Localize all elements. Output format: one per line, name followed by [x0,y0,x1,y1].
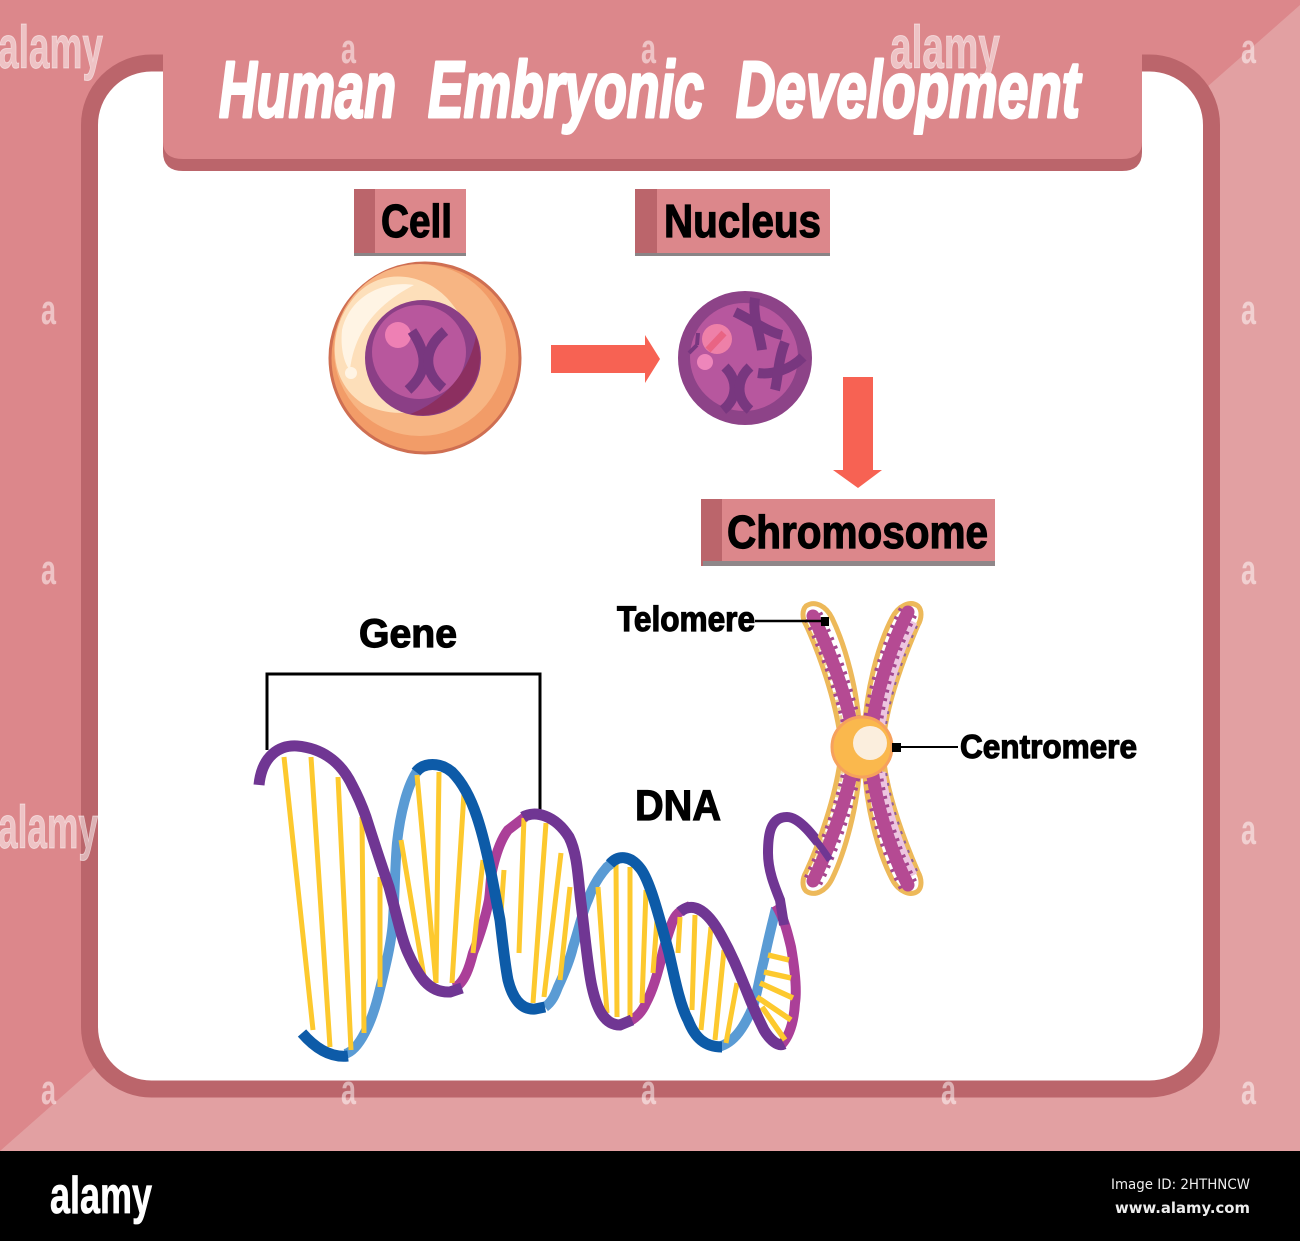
watermarks: a [1241,806,1256,853]
label: Centromere with leader: Centromere [960,728,1137,765]
back strand segments [345,770,796,1054]
watermarks: alamy [0,14,103,81]
label: Nucleus [635,189,830,256]
title: Development [736,45,1082,134]
watermarks: a [641,25,656,72]
panel: white rounded frame [90,63,1212,1089]
watermarks: a [41,546,56,593]
footer: image id: Image ID: 2HTHNCW [1111,1177,1250,1193]
watermarks: a [941,1066,956,1113]
DNA end over chromosome [787,817,830,860]
label: Cell: Cell [381,195,452,247]
chromosome upper arms [803,604,921,735]
arrow: cell to nucleus [551,335,660,383]
watermarks: a [1241,1066,1256,1113]
watermarks: a [641,1066,656,1113]
footer: logo: alamy [50,1167,152,1225]
nucleus chromosomes [689,298,803,410]
label: Gene: Gene [359,612,457,656]
gene bracket [267,674,540,810]
watermarks: a [341,25,356,72]
watermarks: a [1241,25,1256,72]
watermarks: a [1241,286,1256,333]
label: Cell [354,189,466,256]
front strand segments [259,746,829,1056]
watermarks: alamy [0,794,98,861]
arrow: nucleus to chromosome [833,377,882,488]
label: Chromosome [701,499,995,566]
illustration: chromosome [803,604,921,893]
label: Telomere with leader: Telomere [617,600,755,639]
watermarks: a [41,1066,56,1113]
title: Human [219,45,396,134]
watermarks: alamy [890,14,1000,81]
chromosome lower arms [803,762,921,893]
centromere [832,717,892,777]
title banner [163,0,1142,171]
watermarks: a [341,1066,356,1113]
label: Nucleus: Nucleus [664,195,821,247]
label: DNA: DNA [635,782,721,830]
cell nucleus [365,300,481,416]
illustration: nucleus [678,291,812,425]
label: Centromere with leader [892,728,1137,765]
illustration: cell [330,263,520,453]
cell chromosome [408,331,445,390]
watermarks: a [1241,546,1256,593]
watermarks: a [41,286,56,333]
label: Chromosome: Chromosome [727,506,988,558]
title: Embryonic [428,45,704,134]
illustration: DNA double helix [259,746,829,1056]
title [219,45,1082,134]
yellow base pairs [284,757,793,1050]
footer: url: www.alamy.com [1115,1199,1250,1217]
